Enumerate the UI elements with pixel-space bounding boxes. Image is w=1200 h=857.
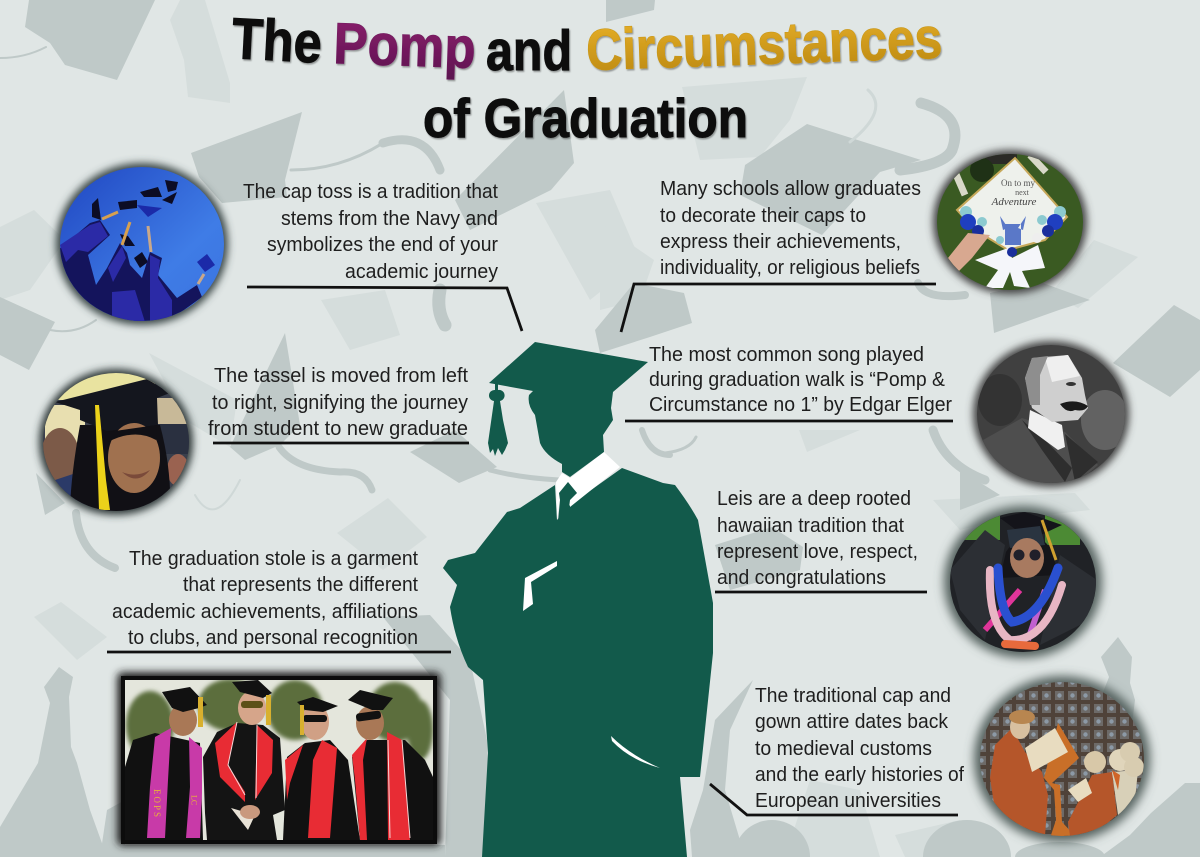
title	[230, 6, 943, 149]
callout: stole: that represents the different	[183, 573, 418, 596]
graduate 1	[125, 687, 207, 840]
callout: cap toss	[243, 180, 522, 331]
title word: Pomp: Pomp	[333, 11, 477, 81]
callout: decorated caps: to decorate their caps to	[660, 204, 866, 227]
callout: leis: Leis are a deep rooted	[717, 487, 911, 510]
callout: cap toss: The cap toss is a tradition that	[243, 180, 498, 203]
photo: leis	[944, 506, 1102, 658]
callout: cap toss: symbolizes the end of your	[267, 233, 498, 256]
photo: medieval manuscript	[974, 676, 1150, 842]
callout: song: The most common song played	[649, 343, 924, 366]
callout: medieval attire	[710, 684, 964, 815]
callout: medieval attire: to medieval customs	[755, 737, 932, 760]
callout: tassel: to right, signifying the journey	[212, 391, 469, 414]
callout: song	[625, 343, 953, 421]
callout: medieval attire: The traditional cap and	[755, 684, 951, 707]
photo: decorated cap: next	[1015, 188, 1030, 197]
callout: leis	[715, 487, 927, 592]
photo: tassel	[39, 369, 195, 515]
title line: of Graduation: of Graduation	[423, 87, 748, 149]
photo: decorated cap	[933, 150, 1087, 295]
callout: leis: represent love, respect,	[717, 540, 918, 563]
graduate 1: EOPS	[152, 789, 162, 819]
callout: decorated caps	[621, 177, 936, 332]
graduate silhouette	[443, 342, 713, 857]
title word: Circumstances: Circumstances	[585, 6, 943, 83]
callout: song: Circumstance no 1” by Edgar Elger	[649, 393, 952, 416]
title word: The: The	[230, 6, 324, 76]
photo: Edward Elgar	[973, 341, 1130, 487]
photo: decorated cap: On to my	[1001, 178, 1035, 188]
graduate 2	[203, 680, 285, 840]
graduate 4	[348, 690, 433, 840]
gown	[443, 468, 713, 857]
callout: stole	[107, 547, 451, 652]
tassel	[488, 383, 508, 456]
callout: tassel: The tassel is moved from left	[214, 364, 468, 387]
callout: song: during graduation walk is “Pomp &	[649, 368, 945, 391]
callout: tassel	[208, 364, 469, 443]
graduate 3	[283, 697, 360, 840]
callout: decorated caps: Many schools allow graduates	[660, 177, 921, 200]
callout: cap toss: academic journey	[345, 260, 499, 283]
callout: stole: to clubs, and personal recognition	[128, 626, 418, 649]
cap and head	[489, 342, 648, 477]
callout: leis: hawaiian tradition that	[717, 514, 904, 537]
photo: cap toss	[56, 163, 228, 325]
graduate 1: LC	[190, 795, 198, 805]
callout: decorated caps: express their achievements,	[660, 230, 901, 253]
title word: and: and	[486, 19, 572, 83]
callout: medieval attire: and the early histories of	[755, 763, 964, 786]
callout: stole: academic achievements, affiliations	[112, 600, 418, 623]
callout: medieval attire: gown attire dates back	[755, 710, 949, 733]
photo: graduates wearing stoles	[117, 672, 441, 846]
photo: decorated cap: Adventure	[991, 196, 1037, 208]
pocket highlight	[523, 561, 557, 611]
collar	[556, 452, 620, 520]
tie	[558, 482, 577, 522]
callout: stole: The graduation stole is a garment	[129, 547, 418, 570]
callout: medieval attire: European universities	[755, 789, 941, 812]
callout: leis: and congratulations	[717, 566, 886, 589]
callout: tassel: from student to new graduate	[208, 417, 468, 440]
callout: cap toss: stems from the Navy and	[281, 207, 498, 230]
sleeve highlight	[611, 736, 660, 768]
callout: decorated caps: individuality, or religious beliefs	[660, 256, 920, 279]
